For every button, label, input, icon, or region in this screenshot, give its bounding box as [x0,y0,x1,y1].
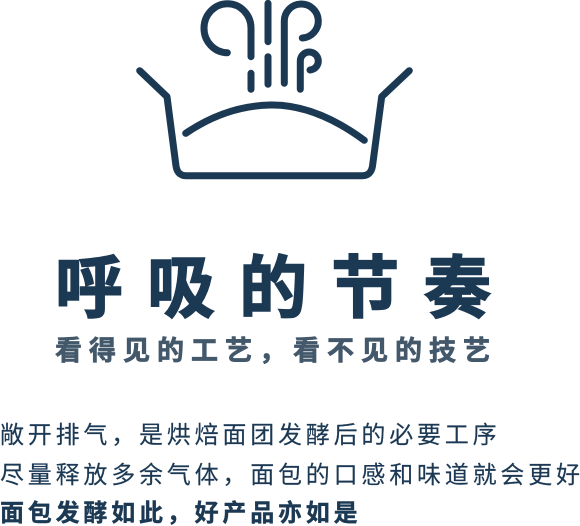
body line 2: 尽量释放多余气体，面包的口感和味道就会更好 [0,462,580,489]
icon: steam [204,3,318,89]
body line 1: 敞开排气，是烘焙面团发酵后的必要工序 [0,422,500,449]
body text [0,422,580,526]
title: 呼吸的节奏 [55,251,516,327]
subtitle: 看得见的工艺，看不见的技艺 [55,336,497,366]
icon: dough dome [186,105,364,140]
icon: pan [140,71,409,176]
icon: dough rising in a pan with steam [136,0,413,180]
